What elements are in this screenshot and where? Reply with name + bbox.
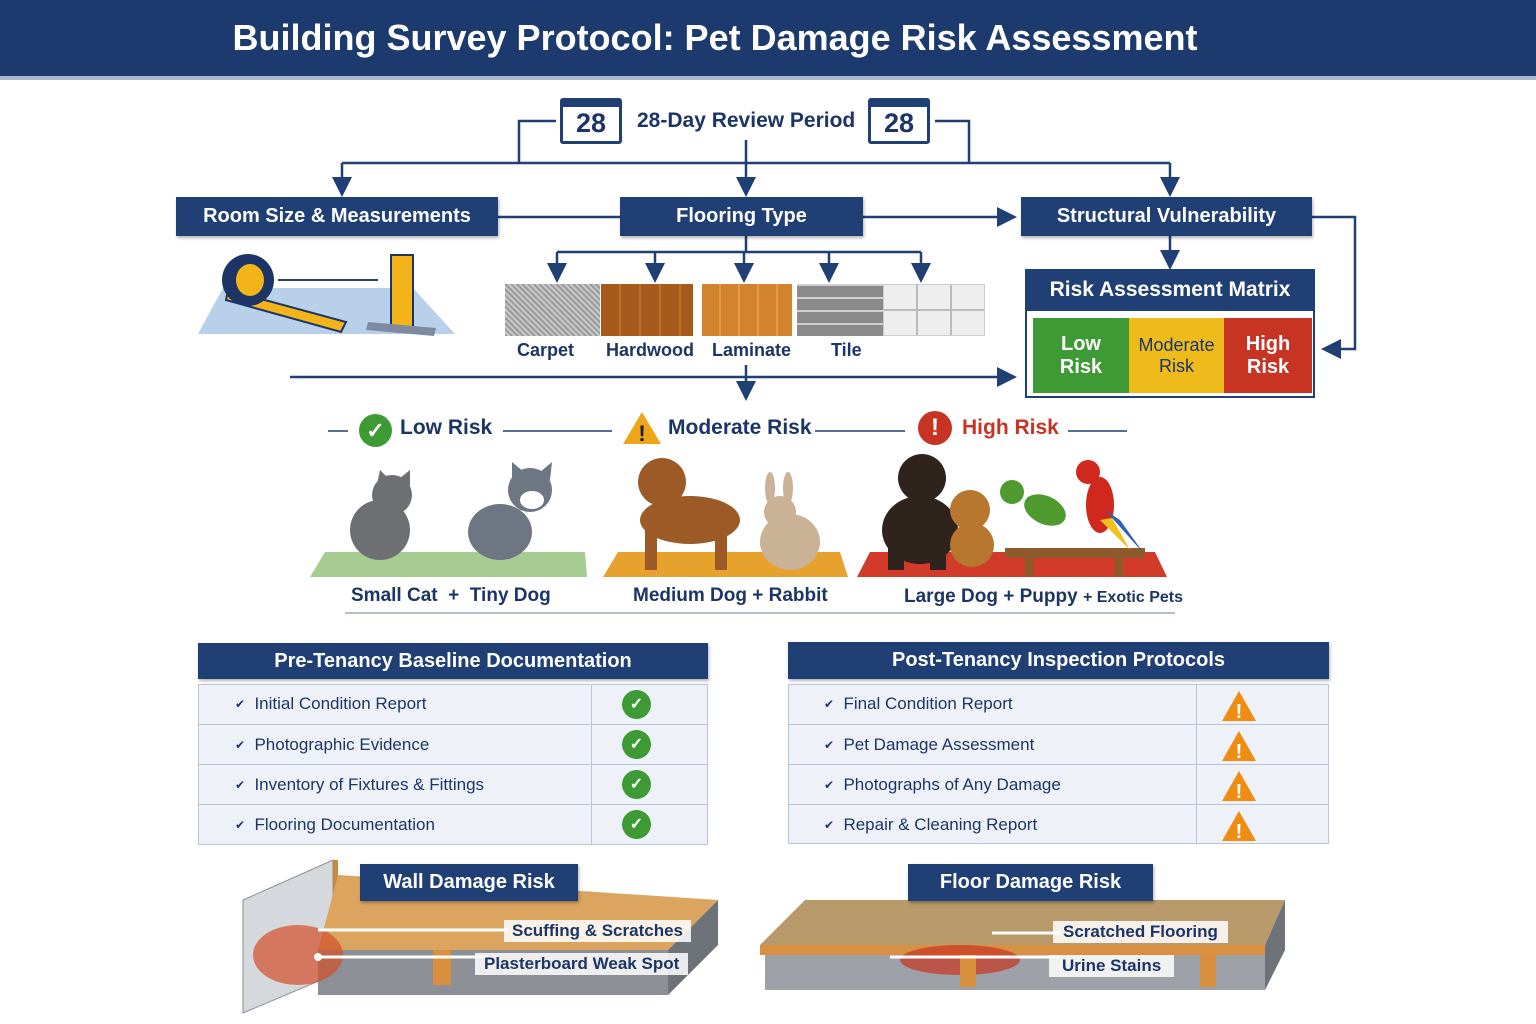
green parrot — [1000, 480, 1071, 532]
callout: plasterboard: Plasterboard Weak Spot — [484, 954, 679, 973]
post-tenancy table: ✔ — [824, 697, 834, 711]
label: wall damage risk — [360, 864, 578, 901]
box: flooring type — [620, 197, 863, 236]
text: Medium Dog + Rabbit — [633, 585, 828, 606]
warning icons: ! — [1236, 781, 1242, 803]
pre-tenancy table: Inventory of Fixtures & Fittings — [254, 774, 484, 794]
rabbit — [760, 472, 820, 570]
heading: high risk: ! — [931, 414, 939, 441]
pre-tenancy table: Initial Condition Report — [254, 694, 426, 713]
pre-tenancy table: Flooring Documentation — [254, 814, 435, 834]
callout: urine stains: Urine Stains — [1062, 956, 1161, 975]
tile white — [883, 284, 985, 336]
heading: moderate risk: Moderate Risk — [668, 416, 812, 439]
carpet — [505, 284, 600, 336]
callout: scuffing: Scuffing & Scratches — [512, 921, 683, 940]
hardwood — [601, 284, 693, 336]
low cell: Risk — [1060, 356, 1102, 378]
pre-tenancy table: Photographic Evidence — [254, 734, 429, 754]
check icons: ✓ — [630, 816, 643, 833]
callout: urine stains — [1049, 955, 1174, 977]
calendar icon left — [560, 98, 622, 144]
check icons — [622, 690, 651, 839]
calendar icon left: 28 — [576, 108, 606, 138]
label: floor damage risk: Floor Damage Risk — [940, 871, 1121, 893]
box: room size: Room Size & Measurements — [203, 205, 471, 227]
cat — [350, 470, 412, 560]
panel: pre-tenancy — [197, 643, 711, 845]
illustration: wall damage — [242, 859, 718, 1014]
tile grey — [797, 284, 885, 336]
calendar icon right: 28 — [884, 108, 914, 138]
pre-tenancy header: Pre-Tenancy Baseline Documentation — [274, 650, 632, 672]
text: Laminate — [712, 340, 791, 360]
heading: low risk: ✓ — [366, 418, 385, 443]
label: floor damage risk — [908, 864, 1153, 901]
moderate cell — [1129, 318, 1224, 393]
flooring labels: Carpet — [517, 340, 574, 360]
matrix header — [1025, 269, 1315, 311]
check icons: ✓ — [630, 696, 643, 713]
review period text: 28-Day Review Period — [637, 109, 855, 132]
heading: high risk: High Risk — [962, 416, 1059, 439]
heading: moderate risk: ! — [638, 421, 646, 446]
check icons: ✓ — [630, 776, 643, 793]
illustration: floor damage — [760, 900, 1285, 990]
tiny dog — [468, 462, 552, 560]
box: room size — [176, 197, 498, 236]
puppy — [950, 490, 994, 567]
large dog — [882, 454, 958, 570]
calendar icon right — [868, 98, 930, 144]
post-tenancy table: ✔ — [824, 818, 834, 832]
post-tenancy table: Photographs of Any Damage — [843, 774, 1061, 794]
heading: moderate risk — [623, 412, 812, 446]
pre-tenancy table — [198, 684, 708, 845]
post-tenancy table — [788, 684, 1329, 844]
high cell: Risk — [1247, 356, 1289, 378]
box: flooring type: Flooring Type — [676, 205, 807, 227]
heading: low risk — [359, 414, 492, 447]
title bar — [0, 0, 1536, 80]
risk assessment matrix — [1025, 269, 1315, 398]
pet illustrations — [310, 454, 1167, 577]
heading: high risk — [918, 411, 1059, 445]
post-tenancy table: ✔ — [824, 738, 834, 752]
flooring samples — [505, 284, 985, 336]
post-tenancy header: Post-Tenancy Inspection Protocols — [892, 649, 1225, 671]
post-tenancy header — [788, 642, 1329, 679]
macaw — [1076, 460, 1145, 555]
warning icons: ! — [1236, 821, 1242, 843]
high mat — [857, 552, 1167, 577]
pre-tenancy table: ✔ — [235, 778, 245, 792]
callout: scratched flooring: Scratched Flooring — [1063, 922, 1218, 941]
box: structural vulnerability — [1021, 197, 1312, 236]
moderate mat — [603, 552, 848, 577]
high cell — [1224, 318, 1312, 393]
pre-tenancy table: ✔ — [235, 738, 245, 752]
text: Tile — [831, 340, 862, 360]
high cell: High — [1246, 332, 1290, 354]
icon: measuring tape — [198, 254, 455, 336]
moderate cell: Risk — [1159, 356, 1194, 376]
perch — [1005, 548, 1145, 558]
label: wall damage risk: Wall Damage Risk — [383, 871, 555, 893]
warning icons: ! — [1236, 741, 1242, 763]
post-tenancy table: Pet Damage Assessment — [843, 734, 1034, 754]
text: Hardwood — [606, 340, 694, 360]
laminate — [702, 284, 792, 336]
low cell: Low — [1061, 332, 1101, 354]
box: structural vulnerability: Structural Vulnerability — [1057, 205, 1276, 227]
warning icons — [1222, 691, 1256, 843]
warning icons: ! — [1236, 701, 1242, 723]
medium dog — [638, 458, 740, 570]
pet group labels: Small Cat + Tiny Dog — [351, 585, 551, 606]
matrix header: Risk Assessment Matrix — [1050, 278, 1290, 301]
pre-tenancy table: ✔ — [235, 818, 245, 832]
panel: post-tenancy — [787, 642, 1332, 844]
text: Large Dog + Puppy + Exotic Pets — [904, 586, 1183, 607]
title bar: Building Survey Protocol: Pet Damage Risk Assessment — [233, 17, 1197, 58]
pre-tenancy header — [198, 643, 708, 679]
post-tenancy table: Final Condition Report — [843, 694, 1013, 713]
post-tenancy table: ✔ — [824, 778, 834, 792]
pre-tenancy table: ✔ — [235, 697, 245, 711]
moderate cell: Moderate — [1138, 334, 1215, 354]
post-tenancy table: Repair & Cleaning Report — [843, 814, 1037, 834]
low cell — [1033, 318, 1129, 393]
low risk mat — [310, 552, 587, 577]
heading: low risk: Low Risk — [400, 416, 492, 439]
check icons: ✓ — [630, 736, 643, 753]
